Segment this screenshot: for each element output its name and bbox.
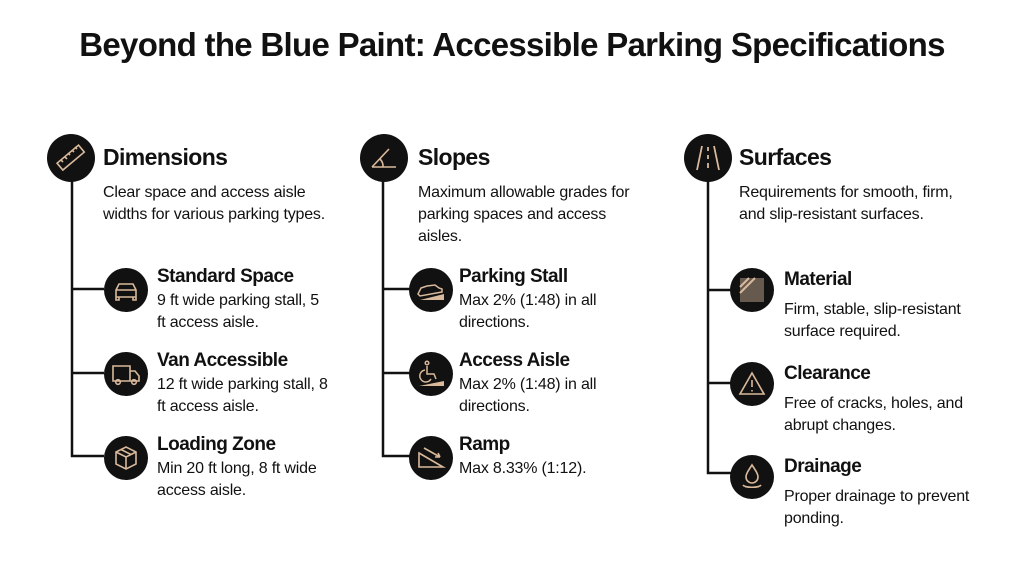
item: standard space [104,266,319,331]
item: ramp: Ramp [459,434,510,455]
item: van accessible [104,350,328,415]
item: access aisle: directions. [459,398,530,415]
description: widths for various parking types. [103,206,325,223]
item: drainage: Drainage [784,456,861,477]
icon: road [684,134,732,182]
item: loading zone [104,434,317,499]
item: drainage: ponding. [784,510,844,527]
description: parking spaces and access [418,206,606,223]
item: loading zone: Min 20 ft long, 8 ft wide [157,460,317,477]
description: Requirements for smooth, firm, [739,184,953,201]
item: standard space: ft access aisle. [157,314,259,331]
description: and slip-resistant surfaces. [739,206,924,223]
item: ramp [409,434,586,480]
description: Clear space and access aisle [103,184,306,201]
item: parking stall: Max 2% (1:48) in all [459,292,596,309]
item: clearance: Clearance [784,363,870,384]
item: access aisle: Access Aisle [459,350,570,371]
item: drainage: Proper drainage to prevent [784,488,969,505]
item: ramp: Max 8.33% (1:12). [459,460,586,477]
item: clearance [730,362,963,434]
icon: ruler [47,134,95,182]
icon: angle [360,134,408,182]
description [739,184,953,223]
description [103,184,325,223]
description [418,184,630,245]
description: aisles. [418,228,462,245]
title: Beyond the Blue Paint: Accessible Parking Specifications [79,26,945,63]
item: material: Firm, stable, slip-resistant [784,301,961,318]
item: loading zone: access aisle. [157,482,246,499]
panel: slopes [360,134,630,480]
item: van accessible: ft access aisle. [157,398,259,415]
item: clearance: abrupt changes. [784,417,896,434]
item: standard space: 9 ft wide parking stall, 5 [157,292,319,309]
item: van accessible: Van Accessible [157,350,288,371]
item: access aisle: Max 2% (1:48) in all [459,376,596,393]
heading: Slopes [418,144,490,170]
panel: surfaces [684,134,970,527]
item: material [730,268,961,340]
item: standard space: Standard Space [157,266,294,287]
heading: Dimensions [103,144,227,170]
item: access aisle [409,350,596,415]
item: drainage [730,455,970,527]
item: parking stall: Parking Stall [459,266,568,287]
item: material: surface required. [784,323,901,340]
item: loading zone: Loading Zone [157,434,276,455]
item: clearance: Free of cracks, holes, and [784,395,963,412]
description: Maximum allowable grades for [418,184,629,201]
item: parking stall [409,266,596,331]
heading: Surfaces [739,144,831,170]
panel: dimensions [47,134,328,499]
item: parking stall: directions. [459,314,530,331]
item: material: Material [784,269,852,290]
item: van accessible: 12 ft wide parking stall, 8 [157,376,328,393]
